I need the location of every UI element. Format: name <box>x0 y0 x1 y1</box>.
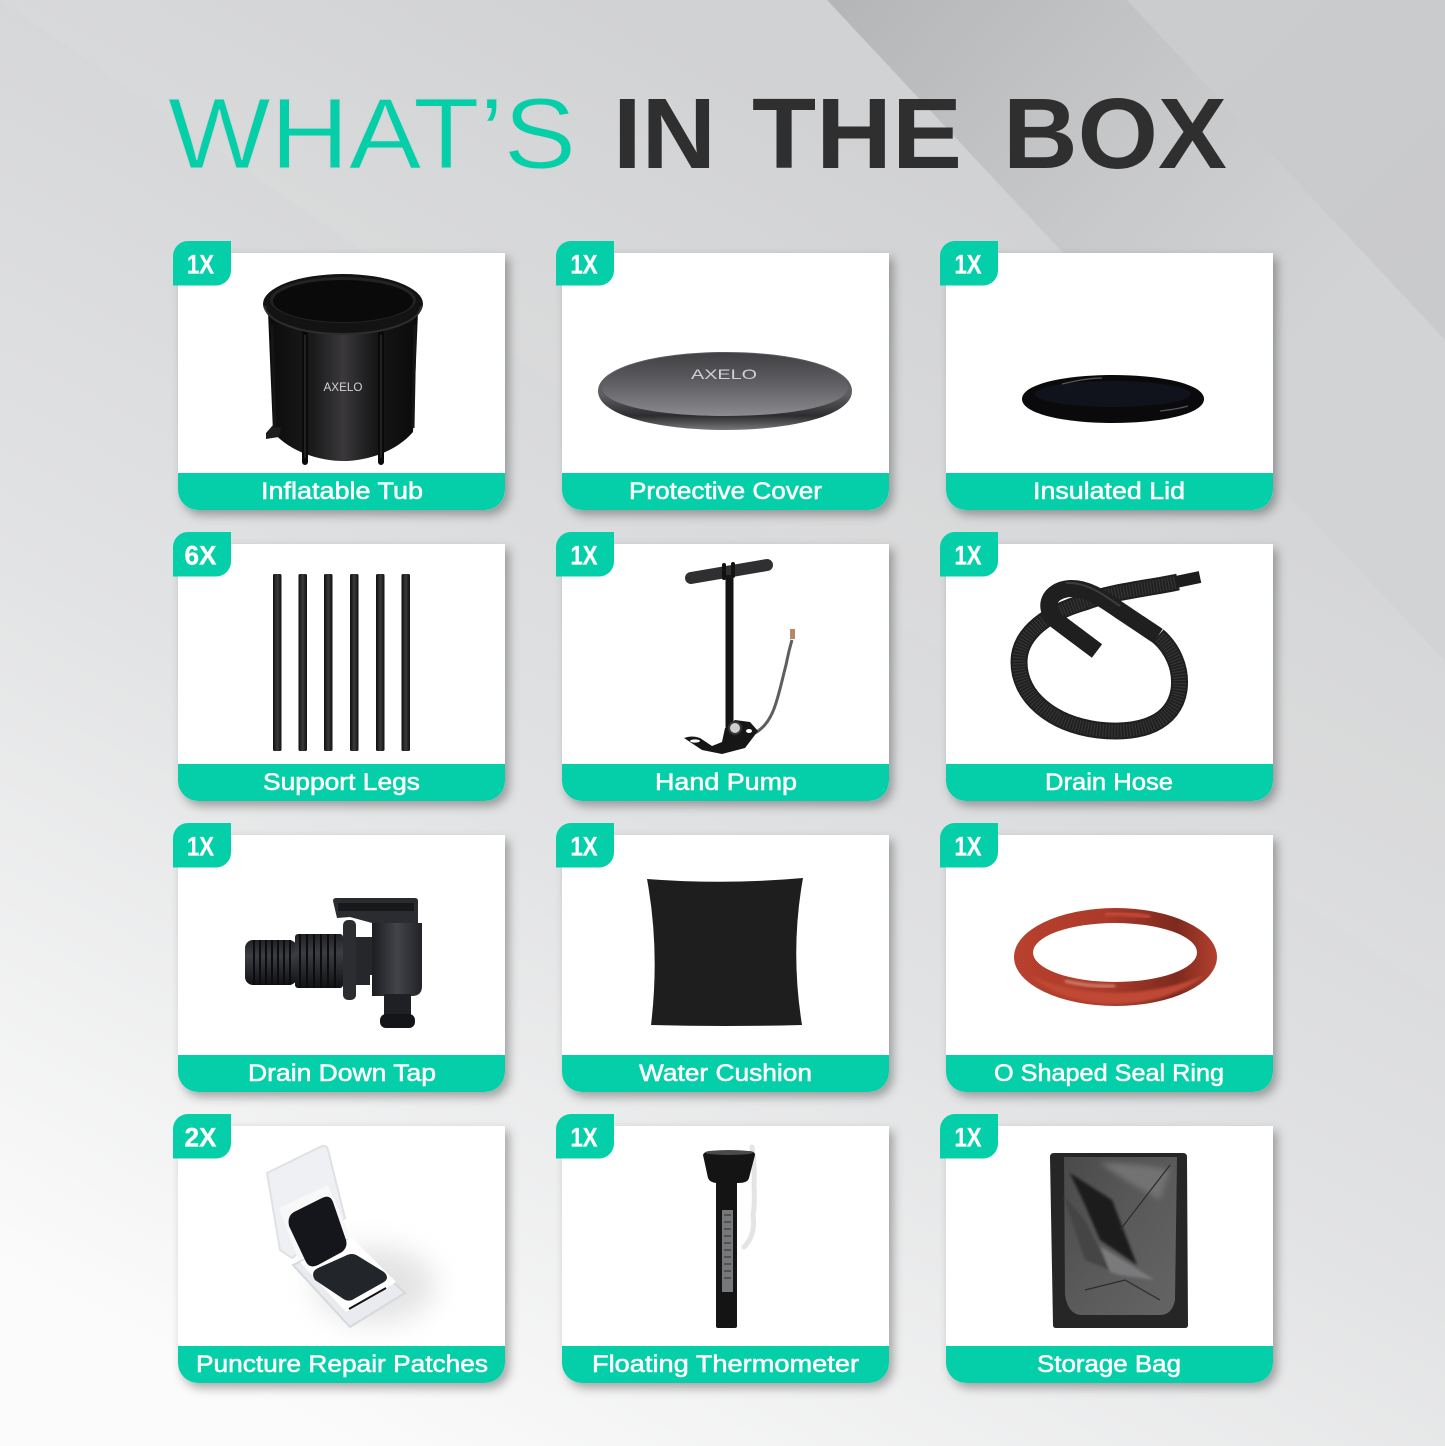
card: Drain Down Tap <box>173 823 505 1092</box>
card: Protective Cover <box>556 241 889 510</box>
label band: Insulated Lid <box>1033 478 1185 505</box>
icon: protective cover <box>598 352 852 430</box>
panel <box>178 835 505 1092</box>
label band <box>178 1055 505 1092</box>
label band: O Shaped Seal Ring <box>994 1060 1224 1087</box>
icon: floating thermometer <box>703 1147 755 1328</box>
quantity badge: 1X <box>570 832 598 862</box>
card: Storage Bag <box>940 1114 1273 1383</box>
panel <box>562 1126 889 1383</box>
quantity badge: 6X <box>184 540 216 570</box>
quantity badge <box>940 241 998 286</box>
label band <box>178 473 505 510</box>
quantity badge: 1X <box>954 832 982 862</box>
icon: inflatable tub <box>263 274 423 462</box>
label band <box>562 473 889 510</box>
panel <box>946 1126 1273 1383</box>
quantity badge <box>556 1114 614 1158</box>
quantity badge <box>173 1114 231 1158</box>
label band <box>562 1346 889 1383</box>
label band: Protective Cover <box>629 478 822 505</box>
quantity badge: 1X <box>187 832 214 862</box>
quantity badge <box>556 241 614 286</box>
card: Puncture Repair Patches <box>173 1114 505 1383</box>
quantity badge <box>556 823 614 868</box>
label band: Floating Thermometer <box>592 1351 859 1378</box>
icon: insulated lid <box>1022 375 1204 423</box>
label band: Support Legs <box>263 769 420 796</box>
quantity badge: 1X <box>954 1122 982 1152</box>
icon: drain down tap <box>245 898 422 1028</box>
label band <box>946 1346 1273 1383</box>
panel <box>178 1126 505 1383</box>
label band <box>562 764 889 801</box>
quantity badge <box>173 823 231 868</box>
quantity badge: 1X <box>954 250 982 280</box>
label band <box>946 1055 1273 1092</box>
title: BOX <box>1003 78 1227 190</box>
panel <box>946 253 1273 510</box>
panel <box>946 544 1273 801</box>
label band <box>946 473 1273 510</box>
panel <box>562 835 889 1092</box>
card: Inflatable Tub <box>173 241 505 510</box>
title: IN <box>613 78 716 190</box>
card: Water Cushion <box>556 823 889 1092</box>
panel <box>562 544 889 801</box>
panel <box>562 253 889 510</box>
icon: protective cover: AXELO <box>691 366 757 382</box>
card: Floating Thermometer <box>556 1114 889 1383</box>
panel <box>178 253 505 510</box>
label band: Hand Pump <box>655 769 797 796</box>
quantity badge: 1X <box>570 540 598 570</box>
quantity badge <box>940 532 998 576</box>
label band <box>178 1346 505 1383</box>
quantity badge <box>940 823 998 868</box>
label band: Inflatable Tub <box>261 478 423 505</box>
card: Hand Pump <box>556 532 889 801</box>
quantity badge: 1X <box>570 1122 598 1152</box>
icon: drain hose <box>1019 577 1200 731</box>
label band: Water Cushion <box>639 1060 812 1087</box>
icon: water cushion <box>647 878 803 1026</box>
panel <box>178 544 505 801</box>
label band: Drain Hose <box>1045 769 1173 796</box>
label band <box>562 1055 889 1092</box>
icon: six support legs <box>273 574 410 751</box>
card: O Shaped Seal Ring <box>940 823 1273 1092</box>
quantity badge <box>173 532 231 576</box>
title: THE <box>752 78 962 190</box>
icon: inflatable tub: AXELO <box>324 380 362 394</box>
icon: repair patches <box>267 1146 435 1327</box>
label band <box>178 764 505 801</box>
title: WHAT’S <box>168 78 576 190</box>
quantity badge <box>940 1114 998 1158</box>
panel <box>946 835 1273 1092</box>
quantity badge: 1X <box>187 250 214 280</box>
label band <box>946 764 1273 801</box>
quantity badge: 1X <box>954 540 982 570</box>
card: Drain Hose <box>940 532 1273 801</box>
label band: Drain Down Tap <box>248 1060 436 1087</box>
label band: Storage Bag <box>1037 1351 1181 1378</box>
label band: Puncture Repair Patches <box>196 1351 488 1378</box>
icon: storage bag <box>1050 1153 1188 1328</box>
card: Support Legs <box>173 532 505 801</box>
quantity badge <box>556 532 614 576</box>
card: Insulated Lid <box>940 241 1273 510</box>
quantity badge <box>173 241 231 286</box>
icon: seal ring <box>1014 908 1217 1006</box>
quantity badge: 2X <box>184 1122 216 1152</box>
title <box>168 78 1227 190</box>
quantity badge: 1X <box>570 250 598 280</box>
icon: hand pump <box>684 564 795 754</box>
